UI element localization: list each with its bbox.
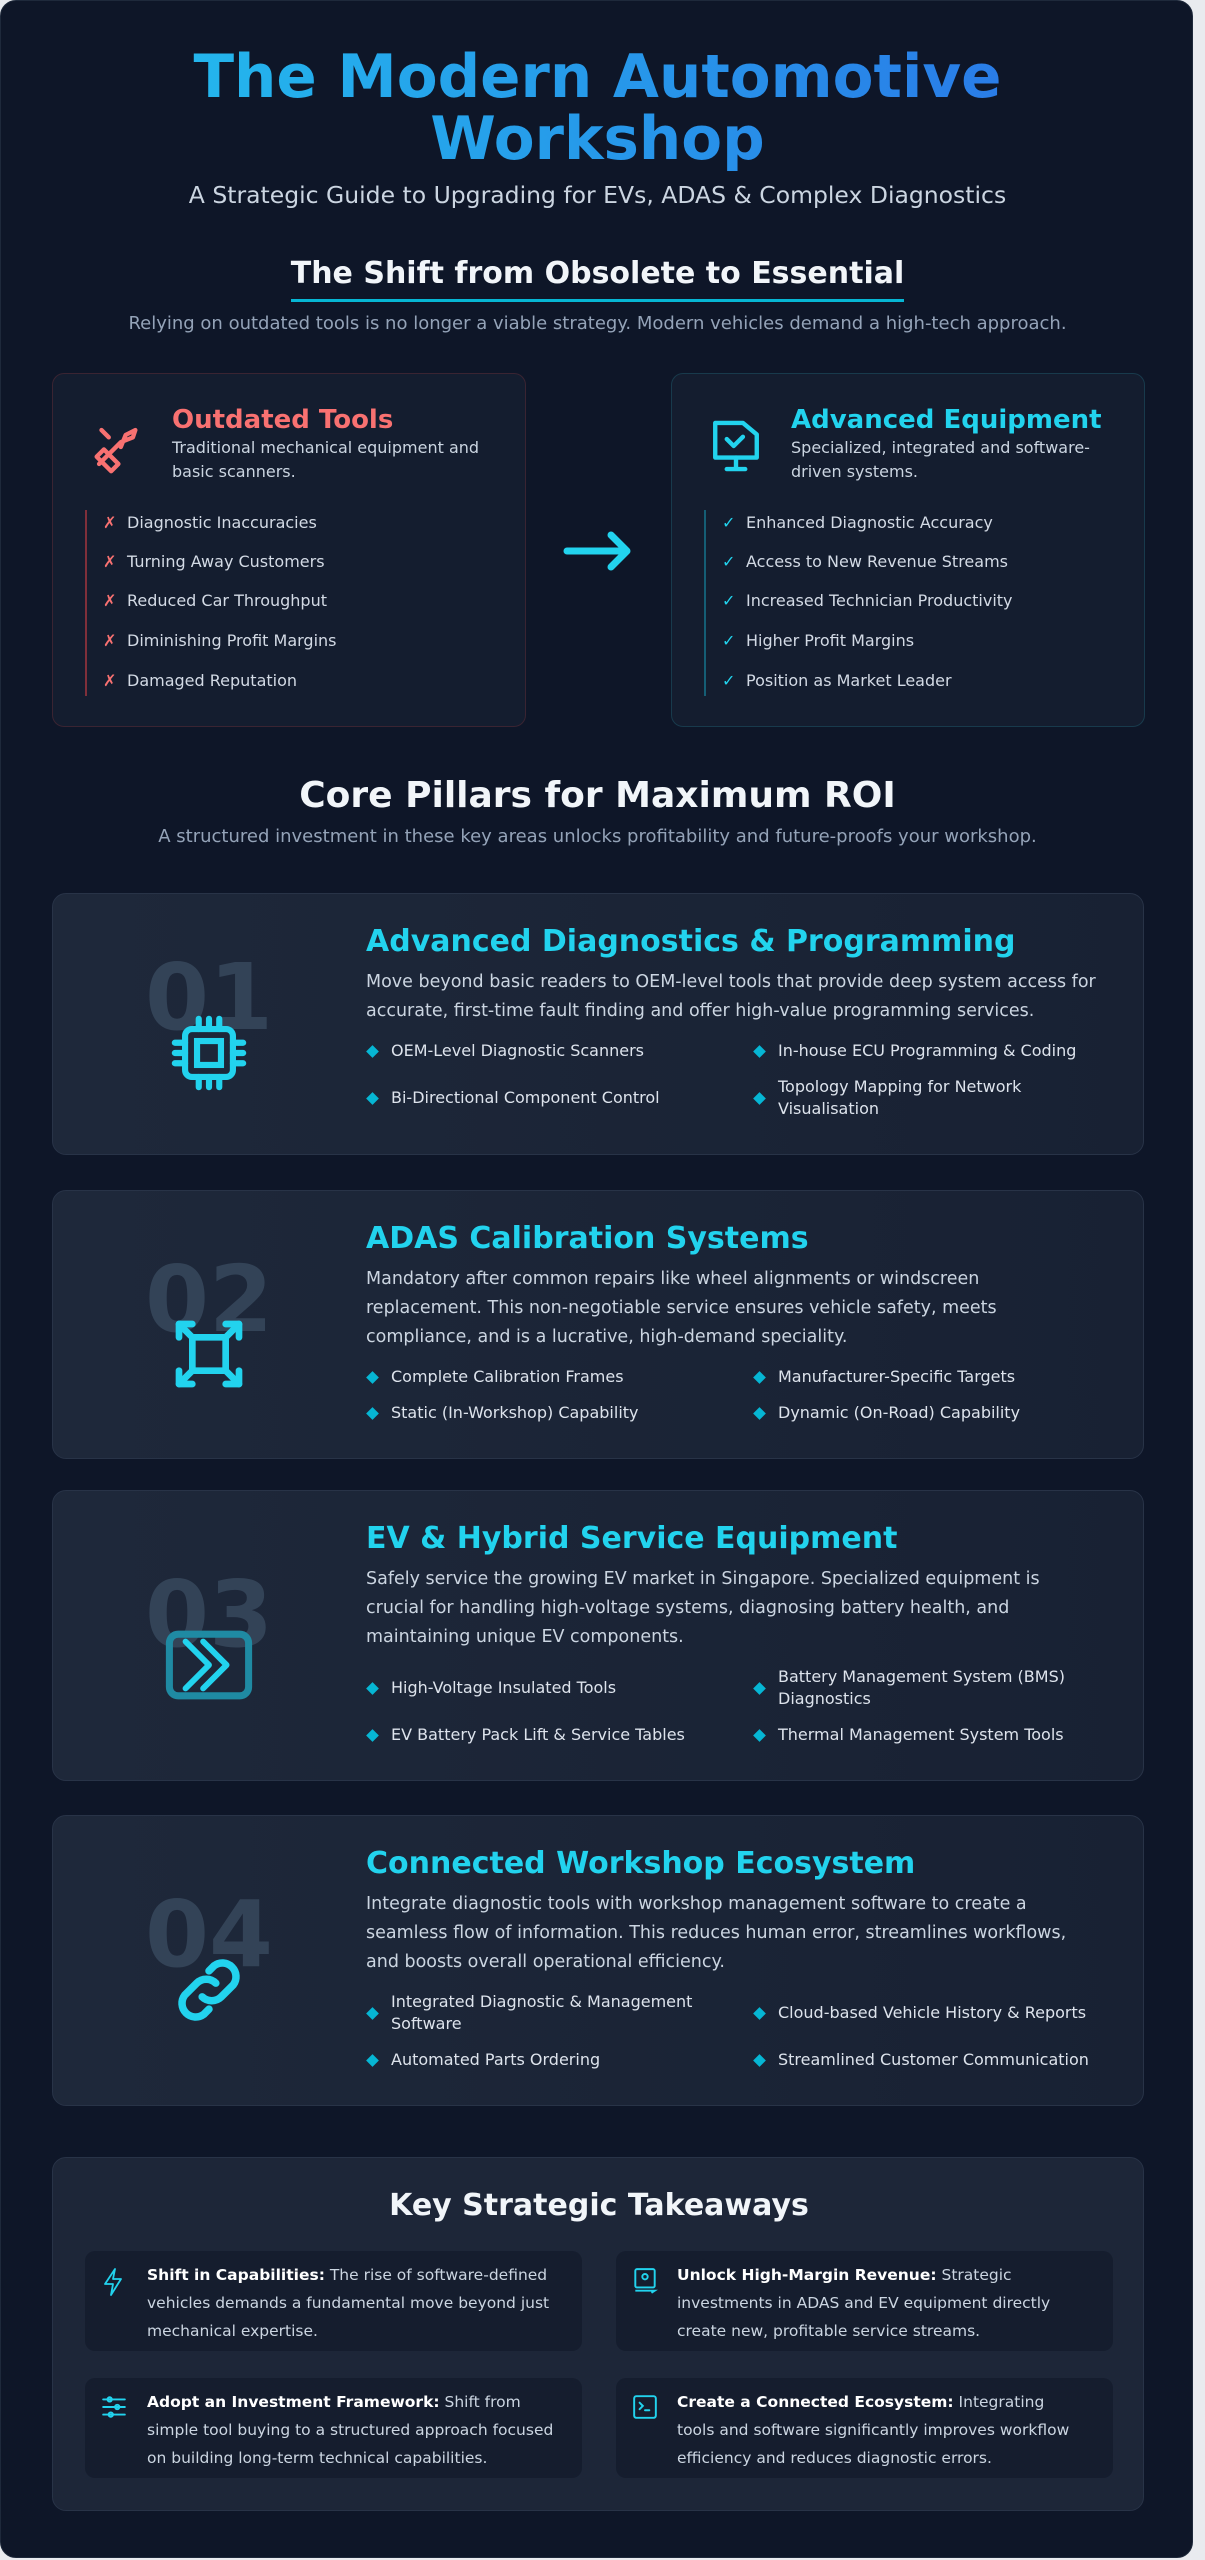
- panel: outdated tools: ✗: [103, 631, 116, 650]
- takeaway: ecosystem: Create a Connected Ecosystem: Integrating: [677, 2393, 1044, 2411]
- panel: pillar 03: Battery Management System (BMS) Diagnostics: [778, 1667, 1065, 1708]
- panel: pillar 01: accurate, first-time fault finding and offer high-value programming services.: [366, 1001, 1034, 1021]
- panel: advanced equipment: ✓: [722, 591, 735, 610]
- panel: outdated tools: [52, 373, 526, 727]
- panel: outdated tools: Turning Away Customers: [127, 552, 325, 571]
- title: The Modern Automotive: [193, 43, 1002, 112]
- panel: pillar 01: In-house ECU Programming & Coding: [778, 1041, 1076, 1060]
- outdated desc: Traditional mechanical equipment and basic scanners.: [172, 438, 479, 481]
- panel: outdated tools: Diagnostic Inaccuracies: [127, 513, 317, 532]
- panel: pillar 02: Manufacturer-Specific Targets: [778, 1367, 1015, 1386]
- panel: advanced equipment: ✓: [722, 552, 735, 571]
- panel: pillar 01: OEM-Level Diagnostic Scanners: [391, 1041, 644, 1060]
- panel: pillar 03: [52, 1490, 1144, 1781]
- panel: pillar 04: seamless flow of information. This reduces human error, streamlines workflows,: [366, 1923, 1066, 1943]
- panel: outdated tools: Reduced Car Throughput: [127, 591, 327, 610]
- outdated list: [85, 510, 87, 696]
- panel: pillar 03: EV Battery Pack Lift & Service Tables: [391, 1725, 685, 1744]
- panel: outdated tools: Damaged Reputation: [127, 671, 297, 690]
- advanced list: [704, 510, 706, 696]
- takeaways title: Key Strategic Takeaways: [389, 2188, 809, 2223]
- pillar 04 title: Connected Workshop Ecosystem: [366, 1846, 915, 1881]
- panel: advanced equipment: Increased Technician Productivity: [746, 591, 1012, 610]
- takeaway: shift in capabilities: [85, 2251, 582, 2351]
- panel: pillar 03: maintaining unique EV components.: [366, 1627, 684, 1647]
- panel: outdated tools: ✗: [103, 671, 116, 690]
- panel: outdated tools: ✗: [103, 552, 116, 571]
- panel: pillar 03: High-Voltage Insulated Tools: [391, 1678, 616, 1697]
- panel: advanced equipment: Access to New Revenue Streams: [746, 552, 1008, 571]
- heading: shift: The Shift from Obsolete to Essential: [291, 256, 904, 291]
- advanced title: Advanced Equipment: [791, 405, 1102, 435]
- panel: advanced equipment: [671, 373, 1145, 727]
- panel: advanced equipment: Position as Market Leader: [746, 671, 952, 690]
- panel: advanced equipment: ✓: [722, 631, 735, 650]
- arrow: [564, 532, 630, 570]
- advanced desc: Specialized, integrated and software-driven systems.: [791, 438, 1090, 481]
- panel: pillar 04: and boosts overall operational efficiency.: [366, 1952, 725, 1972]
- takeaway: framework: [85, 2378, 582, 2478]
- panel: pillar 04: Integrated Diagnostic & Management Software: [391, 1992, 692, 2033]
- panel: pillar 02: Complete Calibration Frames: [391, 1367, 624, 1386]
- panel: pillar 02: Dynamic (On-Road) Capability: [778, 1403, 1020, 1422]
- icon: link: [178, 1959, 240, 2021]
- title: Workshop: [430, 105, 765, 174]
- shift subtext: Relying on outdated tools is no longer a viable strategy. Modern vehicles demand a high-tech approach.: [128, 313, 1067, 334]
- takeaway: shift in capabilities: mechanical expertise.: [147, 2322, 318, 2340]
- panel: outdated tools: Diminishing Profit Margins: [127, 631, 336, 650]
- takeaway: ecosystem: efficiency and reduces diagnostic errors.: [677, 2449, 992, 2467]
- subtitle: A Strategic Guide to Upgrading for EVs, ADAS & Complex Diagnostics: [189, 181, 1006, 209]
- heading: core pillars: Core Pillars for Maximum ROI: [299, 775, 896, 816]
- takeaway: ecosystem: tools and software significantly improves workflow: [677, 2421, 1069, 2439]
- takeaway: revenue: investments in ADAS and EV equipment directly: [677, 2294, 1050, 2312]
- panel: pillar 02: compliance, and is a lucrative, high-demand speciality.: [366, 1327, 847, 1347]
- panel: pillar 02: [52, 1190, 1144, 1459]
- pillar 02 title: ADAS Calibration Systems: [366, 1221, 809, 1256]
- panel: pillar 02: replacement. This non-negotiable service ensures vehicle safety, meets: [366, 1298, 997, 1318]
- panel: pillar 02: Static (In-Workshop) Capability: [391, 1403, 638, 1422]
- panel: pillar 04: Streamlined Customer Communication: [778, 2050, 1089, 2069]
- takeaway: framework: Adopt an Investment Framework: Shift from: [147, 2393, 521, 2411]
- panel: key takeaways: [52, 2157, 1144, 2511]
- panel: pillar 03: 03: [145, 1560, 273, 1668]
- panel: pillar 03: Safely service the growing EV market in Singapore. Specialized equipment is: [366, 1569, 1040, 1589]
- panel: pillar 01: Move beyond basic readers to OEM-level tools that provide deep system access for: [366, 972, 1096, 992]
- panel: pillar 01: Bi-Directional Component Control: [391, 1088, 660, 1107]
- takeaway: shift in capabilities: Shift in Capabilities: The rise of software-defined: [147, 2266, 547, 2284]
- panel: pillar 04: Automated Parts Ordering: [391, 2050, 600, 2069]
- icon: broken tools: [94, 428, 138, 474]
- pillar 03 title: EV & Hybrid Service Equipment: [366, 1521, 897, 1556]
- icon: monitor check: [713, 420, 759, 472]
- panel: pillar 04: Cloud-based Vehicle History & Reports: [778, 2003, 1086, 2022]
- takeaway: revenue: [616, 2251, 1113, 2351]
- panel: pillar 01: Topology Mapping for Network Visualisation: [778, 1077, 1021, 1118]
- panel: pillar 02: 02: [145, 1246, 273, 1352]
- takeaway: revenue: create new, profitable service streams.: [677, 2322, 980, 2340]
- panel: pillar 01: 01: [145, 944, 273, 1051]
- icon: chip: [172, 1016, 246, 1090]
- pillars subtext: A structured investment in these key areas unlocks profitability and future-proofs your workshop.: [158, 826, 1037, 847]
- takeaway: framework: simple tool buying to a structured approach focused: [147, 2421, 553, 2439]
- takeaway: framework: on building long-term technical capabilities.: [147, 2449, 487, 2467]
- panel: advanced equipment: ✓: [722, 671, 735, 690]
- panel: outdated tools: ✗: [103, 591, 116, 610]
- outdated title: Outdated Tools: [172, 405, 393, 435]
- panel: pillar 03: crucial for handling high-voltage systems, diagnosing battery health, and: [366, 1598, 1009, 1618]
- panel: advanced equipment: Higher Profit Margins: [746, 631, 914, 650]
- panel: advanced equipment: ✓: [722, 513, 735, 532]
- panel: pillar 04: 04: [145, 1880, 273, 1988]
- panel: pillar 01: [52, 893, 1144, 1155]
- panel: pillar 04: Integrate diagnostic tools with workshop management software to create a: [366, 1894, 1027, 1914]
- panel: pillar 03: Thermal Management System Tools: [778, 1725, 1064, 1744]
- panel: advanced equipment: Enhanced Diagnostic Accuracy: [746, 513, 993, 532]
- icon: fast forward box: [166, 1630, 252, 1700]
- panel: outdated tools: ✗: [103, 513, 116, 532]
- icon: calibration frame: [176, 1320, 242, 1388]
- takeaway: ecosystem: [616, 2378, 1113, 2478]
- panel: pillar 04: [52, 1815, 1144, 2106]
- panel: pillar 02: Mandatory after common repairs like wheel alignments or windscreen: [366, 1269, 979, 1289]
- takeaway: shift in capabilities: vehicles demands a fundamental move beyond just: [147, 2294, 549, 2312]
- pillar 01 title: Advanced Diagnostics & Programming: [366, 924, 1015, 959]
- title: [193, 43, 1002, 174]
- takeaway: revenue: Unlock High-Margin Revenue: Strategic: [677, 2266, 1012, 2284]
